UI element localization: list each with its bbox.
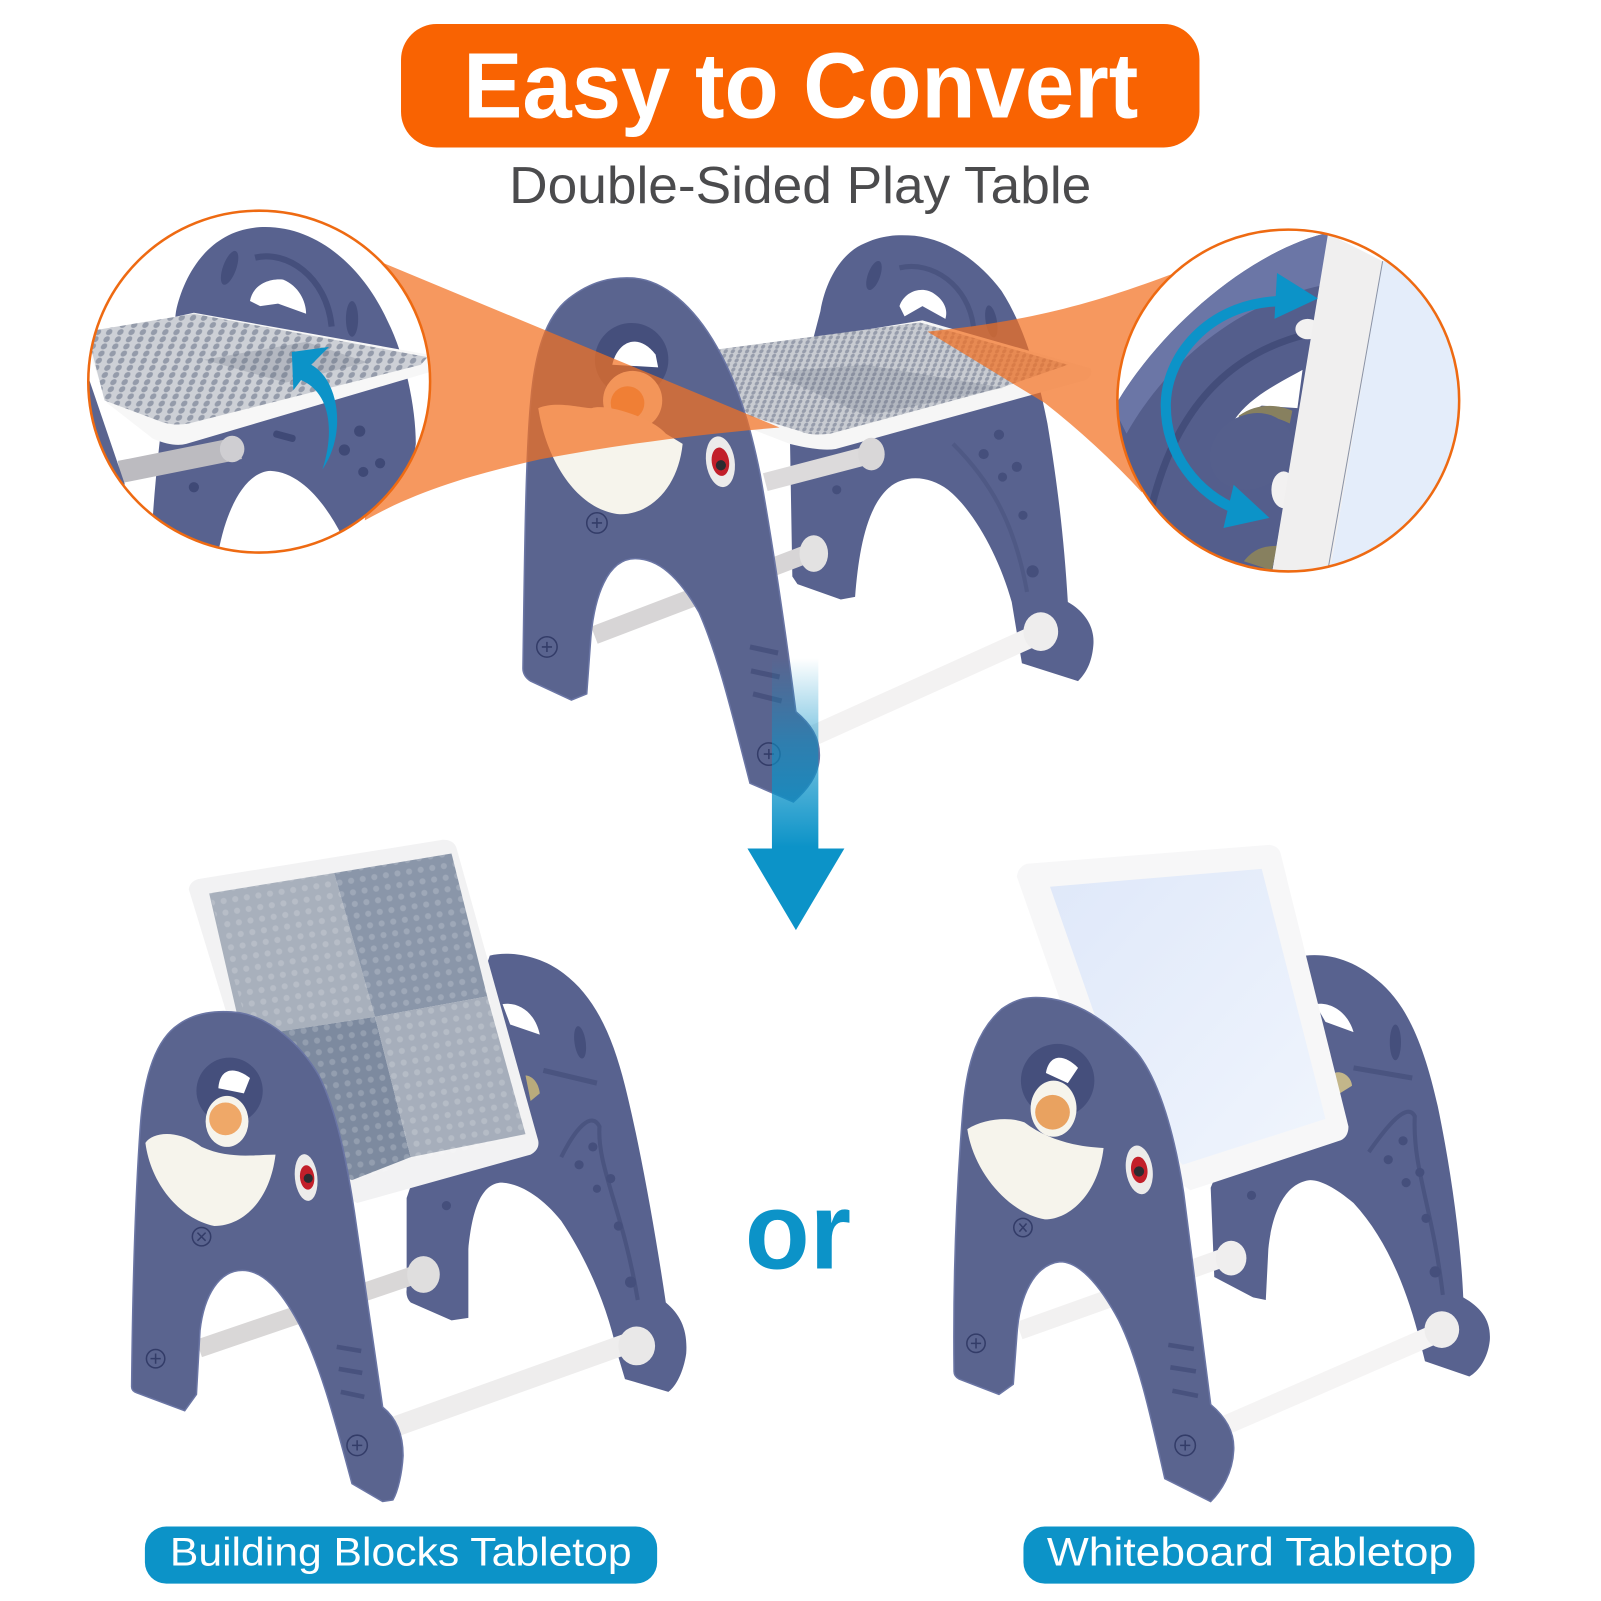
eye	[293, 1153, 320, 1202]
screws	[967, 1218, 1195, 1456]
rear crossbar	[594, 548, 821, 635]
bucket	[145, 1134, 276, 1226]
board frame	[1017, 845, 1348, 1190]
frame	[1272, 234, 1383, 574]
grip slots	[750, 647, 782, 701]
down arrow	[747, 658, 844, 930]
grip slots	[1168, 1345, 1198, 1396]
front crossbar	[1226, 1330, 1445, 1425]
top table: double-sided play table, flat	[523, 235, 1094, 802]
zoom beam: right	[928, 273, 1175, 492]
bucket	[538, 405, 683, 514]
title text: Easy to Convert	[463, 33, 1138, 137]
eye	[1123, 1144, 1156, 1196]
label pill: building blocks: Building Blocks Tabletop	[170, 1530, 632, 1574]
rear leg	[406, 954, 686, 1392]
hole	[196, 1058, 263, 1124]
crossbar	[120, 448, 240, 472]
label pill: whiteboard	[1023, 1527, 1474, 1584]
rear crossbar	[199, 1272, 423, 1348]
front leg	[954, 997, 1234, 1502]
whiteboard surface	[1050, 869, 1325, 1165]
double arrow	[1166, 273, 1318, 528]
knob disc	[603, 371, 662, 430]
rear legs and table	[698, 235, 1094, 681]
label pill: whiteboard: Whiteboard Tabletop	[1047, 1530, 1453, 1574]
subtitle: Double-Sided Play Table	[509, 157, 1091, 215]
eye	[703, 434, 738, 489]
whiteboard panel	[1331, 260, 1458, 564]
hole	[595, 323, 668, 396]
screws	[537, 513, 780, 765]
left detail circle	[84, 211, 430, 561]
board studs	[209, 854, 526, 1180]
bucket	[967, 1119, 1104, 1219]
screws	[146, 1228, 367, 1456]
grip slots	[337, 1347, 364, 1397]
arch close-up	[1114, 232, 1331, 574]
rotate arrow	[292, 347, 337, 469]
tabletop	[160, 312, 408, 445]
building blocks table	[132, 840, 686, 1502]
rear leg	[1211, 955, 1490, 1377]
hole	[1021, 1044, 1094, 1117]
board frame	[189, 840, 538, 1203]
right detail circle	[1114, 224, 1463, 574]
pegs	[1295, 318, 1314, 340]
zoom beam: left	[365, 263, 780, 520]
title banner	[401, 24, 1199, 147]
label pill: building blocks	[145, 1527, 657, 1584]
sliver leg	[90, 380, 125, 485]
rear crossbar	[1019, 1254, 1234, 1331]
knob	[1035, 1095, 1070, 1130]
front leg	[132, 1012, 403, 1502]
upper crossbar	[765, 454, 872, 482]
rear arch	[151, 227, 416, 561]
word or: or	[745, 1170, 851, 1292]
front crossbar	[395, 1340, 638, 1427]
knob	[209, 1103, 242, 1135]
front crossbar	[815, 635, 1036, 735]
front leg	[523, 278, 819, 802]
whiteboard table	[954, 845, 1490, 1502]
